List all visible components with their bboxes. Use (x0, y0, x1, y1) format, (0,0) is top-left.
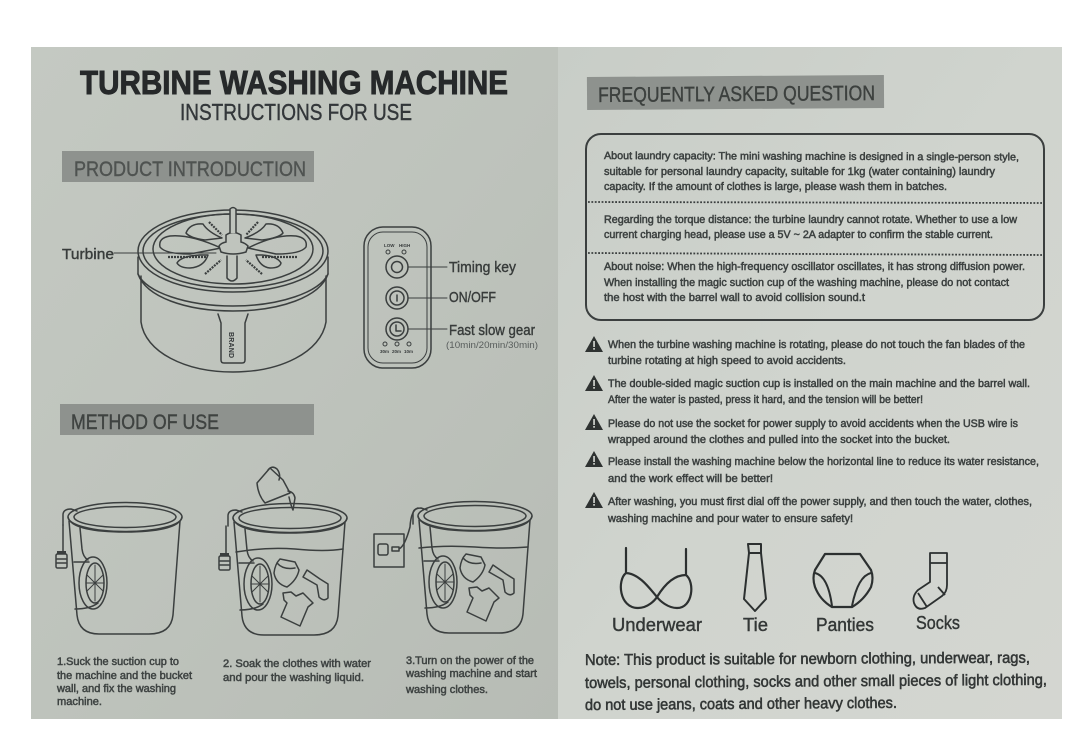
text: noise: the host with the barrel wall to avoid collision sound.t (604, 292, 865, 304)
text: step 2: and pour the washing liquid. (223, 672, 364, 684)
warning 2: The double-sided magic suction cup is installed on the main machine and the barrel wall. (608, 378, 1030, 390)
warning 3 (585, 414, 1018, 446)
warning 2: After the water is pasted, press it hard, and the tension will be better! (608, 394, 923, 406)
label: on/off: ON/OFF (449, 289, 496, 306)
warning 5: After washing, you must first dial off the power supply, and then touch the water, clothes, (608, 496, 1032, 508)
text: laundry capacity: capacity. If the amount of clothes is large, please wash them in batches. (604, 181, 947, 193)
icon: socks (914, 553, 960, 633)
text: torque distance: current charging head, please use a 5V ~ 2A adapter to confirm the stable current. (604, 229, 993, 241)
text: step 1: 1.Suck the suction cup to (57, 656, 179, 668)
text: laundry capacity (604, 150, 1019, 193)
heading: method of use: METHOD OF USE (71, 411, 219, 434)
illustration: step 2 bucket with clothes and pitcher (219, 467, 347, 635)
text: torque distance: Regarding the torque distance: the turbine laundry cannot rotate. Whether to use a low (604, 214, 1017, 226)
label: turbine: Turbine (62, 246, 114, 263)
title: TURBINE WASHING MACHINE (80, 64, 508, 101)
illustration: control panel: LOW (384, 243, 395, 248)
text: laundry capacity: About laundry capacity: The mini washing machine is designed in a single-person style, (604, 150, 1019, 163)
text: step 3: washing machine and start (405, 668, 537, 680)
warning 4 (585, 451, 1039, 485)
icon: socks: Socks (916, 613, 960, 633)
heading: product introduction: PRODUCT INTRODUCTION (74, 158, 306, 181)
illustration: step 1 bucket (56, 502, 182, 634)
icon: panties: Panties (816, 615, 874, 635)
warning 1 (585, 336, 1025, 367)
text: noise: When installing the magic suction cup of the washing machine, please do not contact (604, 277, 1009, 289)
illustration: control panel (364, 227, 431, 368)
text: step 3 (405, 655, 537, 696)
illustration: turbine washing machine (138, 208, 328, 372)
warning 5 (585, 492, 1032, 525)
text: step 1: the machine and the bucket (57, 670, 192, 682)
heading: method of use (60, 404, 314, 435)
label: fast slow gear: (10min/20min/30min) (446, 340, 538, 351)
icon: underwear: Underwear (612, 615, 702, 635)
text: step 1: machine. (57, 696, 102, 708)
warning 3: Please do not use the socket for power supply to avoid accidents when the USB wire is (608, 418, 1018, 430)
icon: panties (814, 554, 874, 635)
warning 1: turbine rotating at high speed to avoid accidents. (608, 355, 846, 367)
illustration: control panel: 20m (392, 349, 401, 354)
icon: wall socket (374, 534, 404, 567)
icon: underwear (612, 548, 702, 635)
panel: right page (558, 47, 1062, 719)
text: noise (604, 261, 1025, 304)
warning 5: washing machine and pour water to ensure safety! (607, 513, 853, 525)
text: step 2 (223, 658, 371, 684)
warning 2 (585, 375, 1030, 406)
text: torque distance (604, 214, 1017, 241)
warning 4: Please install the washing machine below the horizontal line to reduce its water resistance, (608, 456, 1039, 468)
text: step 3: 3.Turn on the power of the (406, 655, 534, 667)
text: step 2: 2. Soak the clothes with water (223, 658, 371, 670)
label: timing key (408, 259, 516, 276)
text: noise: About noise: When the high-frequency oscillator oscillates, it has strong diffusion power. (604, 261, 1025, 273)
illustration: control panel: HIGH (399, 243, 410, 248)
label: fast slow gear (408, 322, 538, 351)
note (585, 650, 1047, 714)
text: step 1 (56, 656, 192, 708)
note: towels, personal clothing, socks and other small pieces of light clothing, (585, 672, 1047, 692)
subtitle: INSTRUCTIONS FOR USE (180, 99, 412, 125)
heading: frequently asked question: FREQUENTLY ASKED QUESTION (598, 82, 875, 107)
warning 1: When the turbine washing machine is rotating, please do not touch the fan blades of the (608, 339, 1025, 351)
turbine blades (160, 222, 306, 281)
text: laundry capacity: suitable for personal laundry capacity, suitable for 1kg (water containing) laundry (604, 166, 996, 178)
panel: left page (31, 47, 558, 719)
illustration: control panel: 10m (404, 349, 413, 354)
icon: tie (743, 544, 768, 635)
illustration: step 3 bucket and socket (374, 502, 532, 633)
icon: tie: Tie (743, 615, 768, 635)
text: step 3: washing clothes. (405, 684, 488, 696)
note: do not use jeans, coats and other heavy clothes. (585, 695, 897, 714)
warning 3: wrapped around the clothes and pulled into the socket into the bucket. (607, 434, 950, 446)
icon: pitcher (257, 467, 295, 510)
warning 4: and the work effect will be better! (608, 473, 773, 485)
text: step 1: wall, and fix the washing (56, 683, 176, 695)
heading: product introduction (62, 151, 314, 182)
panel: FAQ box (586, 134, 1044, 320)
label: timing key: Timing key (449, 259, 516, 276)
heading: frequently asked question (587, 75, 884, 110)
note: Note: This product is suitable for newborn clothing, underwear, rags, (585, 650, 1030, 669)
label: fast slow gear: Fast slow gear (449, 322, 535, 339)
label: on/off (408, 289, 496, 306)
turbine hub (219, 208, 248, 254)
illustration: turbine washing machine: BRAND (227, 332, 234, 358)
illustration: control panel: 30m (380, 349, 389, 354)
